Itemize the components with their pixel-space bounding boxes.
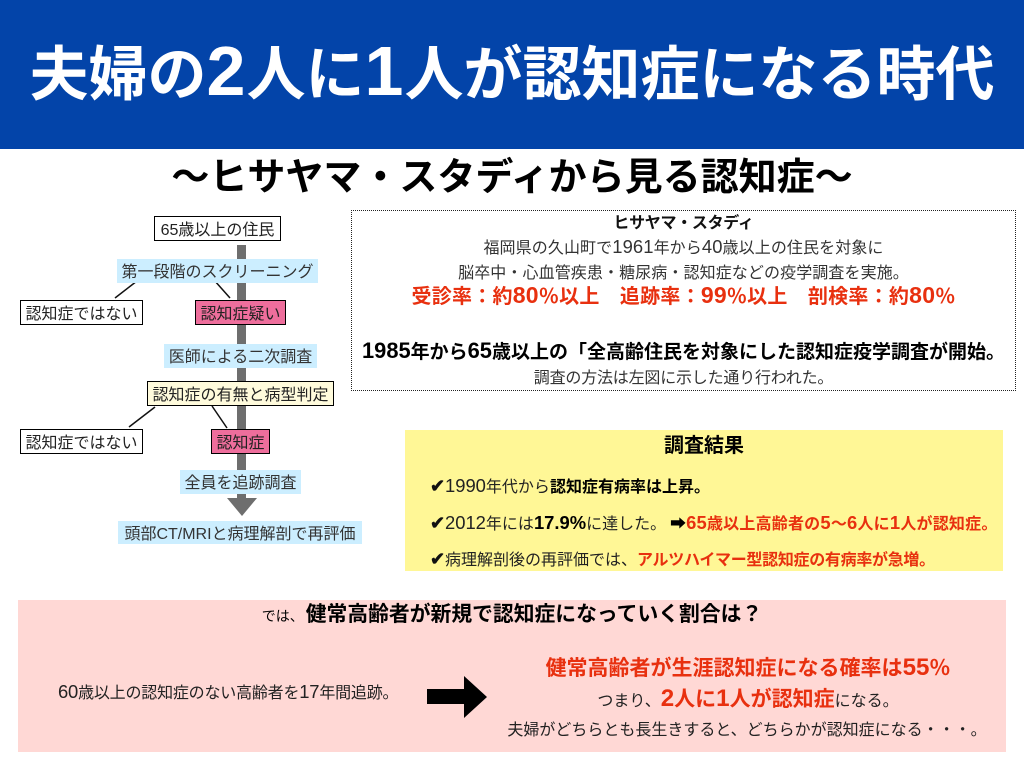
subtitle: 〜ヒサヤマ・スタディから見る認知症〜 [171, 157, 853, 199]
step: re-evaluation: 頭部CT/MRIと病理解剖で再評価 [124, 526, 356, 542]
description: 脳卒中・心血管疾患・糖尿病・認知症などの疫学調査を実施。 [458, 265, 909, 282]
box: diagnosis: 認知症の有無と病型判定 [152, 386, 328, 404]
step: follow-up [180, 470, 301, 494]
panel: Hisayama study [351, 210, 1016, 391]
description [458, 236, 909, 282]
box: residents: 65歳以上の住民 [161, 222, 274, 238]
rates: 受診率：約80％以上 追跡率：99％以上 剖検率：約80％ [411, 282, 956, 308]
box: residents [154, 216, 281, 241]
description: 福岡県の久山町で1961年から40歳以上の住民を対象に [483, 236, 884, 257]
panel question: では、健常高齢者が新規で認知症になっていく割合は？ [262, 603, 762, 626]
box: suspected dementia: 認知症疑い [200, 306, 280, 322]
cohort text: 60歳以上の認知症のない高齢者を17年間追跡。 [58, 681, 398, 702]
title banner: 夫婦の2人に1人が認知症になる時代 [30, 32, 994, 110]
result: 55 percent: 健常高齢者が生涯認知症になる確率は55％ [546, 654, 950, 681]
box: dementia [211, 429, 270, 454]
result 1: ✔ [430, 476, 445, 496]
step: follow-up: 全員を追跡調査 [184, 475, 296, 492]
method note: 調査の方法は左図に示した通り行われた。 [534, 370, 833, 387]
step: second examination: 医師による二次調査 [169, 349, 312, 366]
box: dementia: 認知症 [216, 434, 264, 452]
panel heading: ヒサヤマ・スタディ [613, 215, 754, 232]
box: diagnosis [147, 381, 334, 406]
step: first screening [117, 259, 318, 283]
panel: new-onset rate [18, 600, 1006, 752]
start of survey: 1985年から65歳以上の「全高齢住民を対象にした認知症疫学調査が開始。 [362, 338, 1005, 363]
title banner [0, 0, 1024, 149]
result 3: 病理解剖後の再評価では、アルツハイマー型認知症の有病率が急増。 [445, 552, 935, 569]
result 2: 2012年には17.9%に達した。➡65歳以上高齢者の5〜6人に1人が認知症。 [445, 512, 998, 533]
panel heading: 調査結果 [664, 435, 744, 457]
closing remark: 夫婦がどちらとも長生きすると、どちらかが認知症になる・・・。 [507, 722, 987, 739]
result 3: ✔ [430, 549, 445, 569]
box: not dementia [20, 429, 143, 454]
step: second examination [164, 344, 317, 368]
box: suspected dementia [195, 300, 286, 325]
result 2: ✔ [430, 513, 445, 533]
result 1: 1990年代から認知症有病率は上昇。 [445, 475, 710, 496]
flowchart [20, 216, 362, 544]
step: first screening: 第一段階のスクリーニング [121, 264, 314, 281]
flow arrow [114, 245, 257, 516]
box: not dementia: 認知症ではない [25, 434, 138, 452]
panel: survey results [405, 430, 1003, 571]
box: not dementia: 認知症ではない [25, 306, 138, 322]
icon: arrow [427, 676, 487, 718]
conclusion: つまり、2人に1人が認知症になる。 [597, 685, 899, 712]
box: not dementia [20, 300, 143, 325]
